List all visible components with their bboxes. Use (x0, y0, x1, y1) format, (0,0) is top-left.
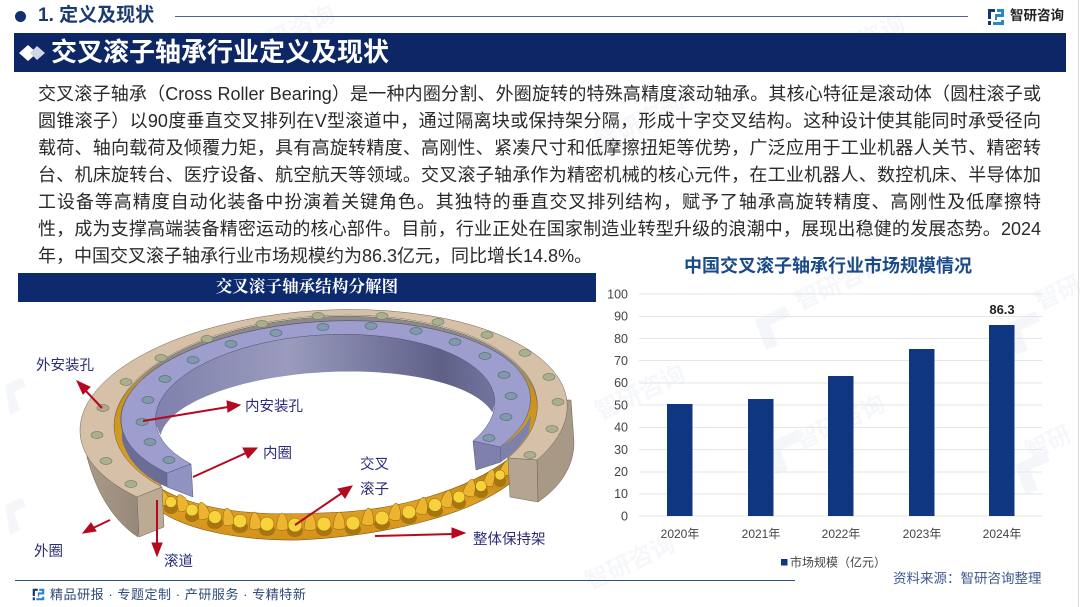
outer ring mounting holes (91, 312, 564, 488)
x axis labels (661, 527, 1021, 541)
y axis labels: 60 (614, 376, 628, 390)
y axis labels: 70 (614, 354, 628, 368)
legend: 市场规模（亿元） (790, 554, 886, 570)
outer ring side walls (85, 400, 574, 537)
bullet (15, 11, 26, 22)
diagram labels: 外安装孔 (36, 357, 94, 374)
icon: diamonds (19, 45, 45, 61)
panel heading: bearing structure (18, 273, 596, 302)
inner ring mounting holes (136, 322, 517, 464)
inner ring right outer side (500, 415, 531, 462)
inner ring outer side (122, 420, 167, 487)
gap between rings (114, 316, 537, 487)
intro text block: 交叉滚子轴承（Cross Roller Bearing）是一种内圈分割、外圈旋转的特殊高精度滚动轴承。其核心特征是滚动体（圆柱滚子或 (38, 84, 1041, 104)
watermark layer: 智研咨询 (591, 360, 690, 425)
intro text block: 性，成为支撑高端装备精密运动的核心部件。目前，行业正处在国家制造业转型升级的浪潮中，展现出稳健的发展态势。2024 (38, 219, 1041, 239)
diagram labels: 内圈 (263, 445, 292, 462)
watermark layer: 智研咨询 (591, 90, 690, 155)
y axis labels: 30 (614, 443, 628, 457)
section title: 1. 定义及现状 (38, 5, 154, 26)
watermark layer: 智研咨询 (241, 0, 340, 65)
diagram labels: 滚子 (360, 481, 389, 498)
inner ring bore (151, 322, 499, 501)
diagram labels: 外圈 (34, 543, 63, 560)
diagram labels: 内安装孔 (245, 398, 303, 415)
cage band (160, 458, 512, 540)
watermark layer: 智研咨询 (811, 10, 910, 75)
x axis labels: 2020年 (661, 527, 699, 541)
arrow: outer mounting hole (77, 381, 102, 408)
inner ring top face (121, 321, 530, 473)
intro text block (38, 84, 1041, 266)
y axis labels: 50 (614, 398, 628, 412)
footer (32, 587, 306, 602)
x axis labels: 2022年 (822, 527, 860, 541)
footer text: 精品研报 · 专题定制 · 产研服务 · 专精特新 (50, 587, 306, 602)
chart title: 中国交叉滚子轴承行业市场规模情况 (684, 256, 972, 276)
y axis labels: 100 (607, 288, 628, 302)
panel heading: bearing structure: 交叉滚子轴承结构分解图 (216, 277, 398, 296)
rollers (155, 457, 515, 537)
y axis labels: 80 (614, 332, 628, 346)
intro text block: 年，中国交叉滚子轴承行业市场规模约为86.3亿元，同比增长14.8%。 (38, 246, 592, 266)
intro text block: 载荷、轴向载荷及倾覆力矩，具有高旋转精度、高刚性、紧凑尺寸和低摩擦扭矩等优势，广泛应用于工业机器人关节、精密转 (38, 138, 1041, 158)
inner ring cut faces (167, 441, 501, 497)
footer logo (32, 588, 44, 600)
outer ring top face (80, 309, 567, 497)
diagram labels: 交叉 (360, 455, 389, 473)
bars (667, 325, 1014, 516)
watermark layer: 智研咨询 (581, 530, 680, 595)
outer ring cut faces (137, 458, 538, 537)
x axis labels: 2024年 (983, 527, 1021, 541)
y axis labels: 10 (614, 487, 628, 501)
value label: 86.3 (989, 302, 1015, 317)
watermark layer: 智研咨询 (791, 250, 890, 315)
banner title: 交叉滚子轴承行业定义及现状 (51, 37, 389, 67)
y axis labels: 90 (614, 310, 628, 324)
y axis labels: 40 (614, 420, 628, 434)
logo: 智研咨询 (988, 8, 1064, 25)
x axis labels: 2021年 (742, 527, 780, 541)
section heading (15, 4, 154, 26)
watermark layer: 智研 (1021, 421, 1076, 465)
intro text block: 圆锥滚子）以90度垂直交叉排列在V型滚道中，通过隔离块或保持架分隔，形成十字交叉结构。这种设计使其能同时承受径向 (38, 111, 1041, 131)
intro text block: 工设备等高精度自动化装备中扮演着关键角色。其独特的垂直交叉排列结构，赋予了轴承高旋转精度、高刚性及低摩擦特 (38, 192, 1041, 212)
arrow: inner mounting hole (143, 401, 240, 421)
arrow: cage (375, 528, 465, 538)
arrow: crossed roller (295, 486, 352, 525)
arrow: outer ring (83, 520, 110, 533)
intro text block: 台、机床旋转台、医疗设备、航空航天等领域。交叉滚子轴承作为精密机械的核心元件，在工业机器人、数控机床、半导体加 (38, 165, 1041, 185)
diagram labels: 整体保持架 (473, 531, 546, 548)
x axis labels: 2023年 (903, 527, 941, 541)
arrow: inner ring (193, 448, 257, 477)
title banner (14, 33, 1066, 72)
logo mark (988, 9, 1004, 25)
y axis labels: 0 (621, 510, 628, 524)
y axis labels (607, 288, 628, 524)
diagram: bearing exploded view (34, 309, 574, 570)
diagram labels (34, 357, 546, 570)
diagram labels: 滚道 (164, 553, 193, 570)
arrow: raceway (152, 500, 162, 556)
watermark layer: 智研咨询 (791, 390, 890, 455)
source note: 资料来源：智研咨询整理 (893, 571, 1042, 586)
bar chart: market size (607, 288, 1042, 570)
y axis labels: 20 (614, 465, 628, 479)
logo text: 智研咨询 (1010, 8, 1064, 23)
